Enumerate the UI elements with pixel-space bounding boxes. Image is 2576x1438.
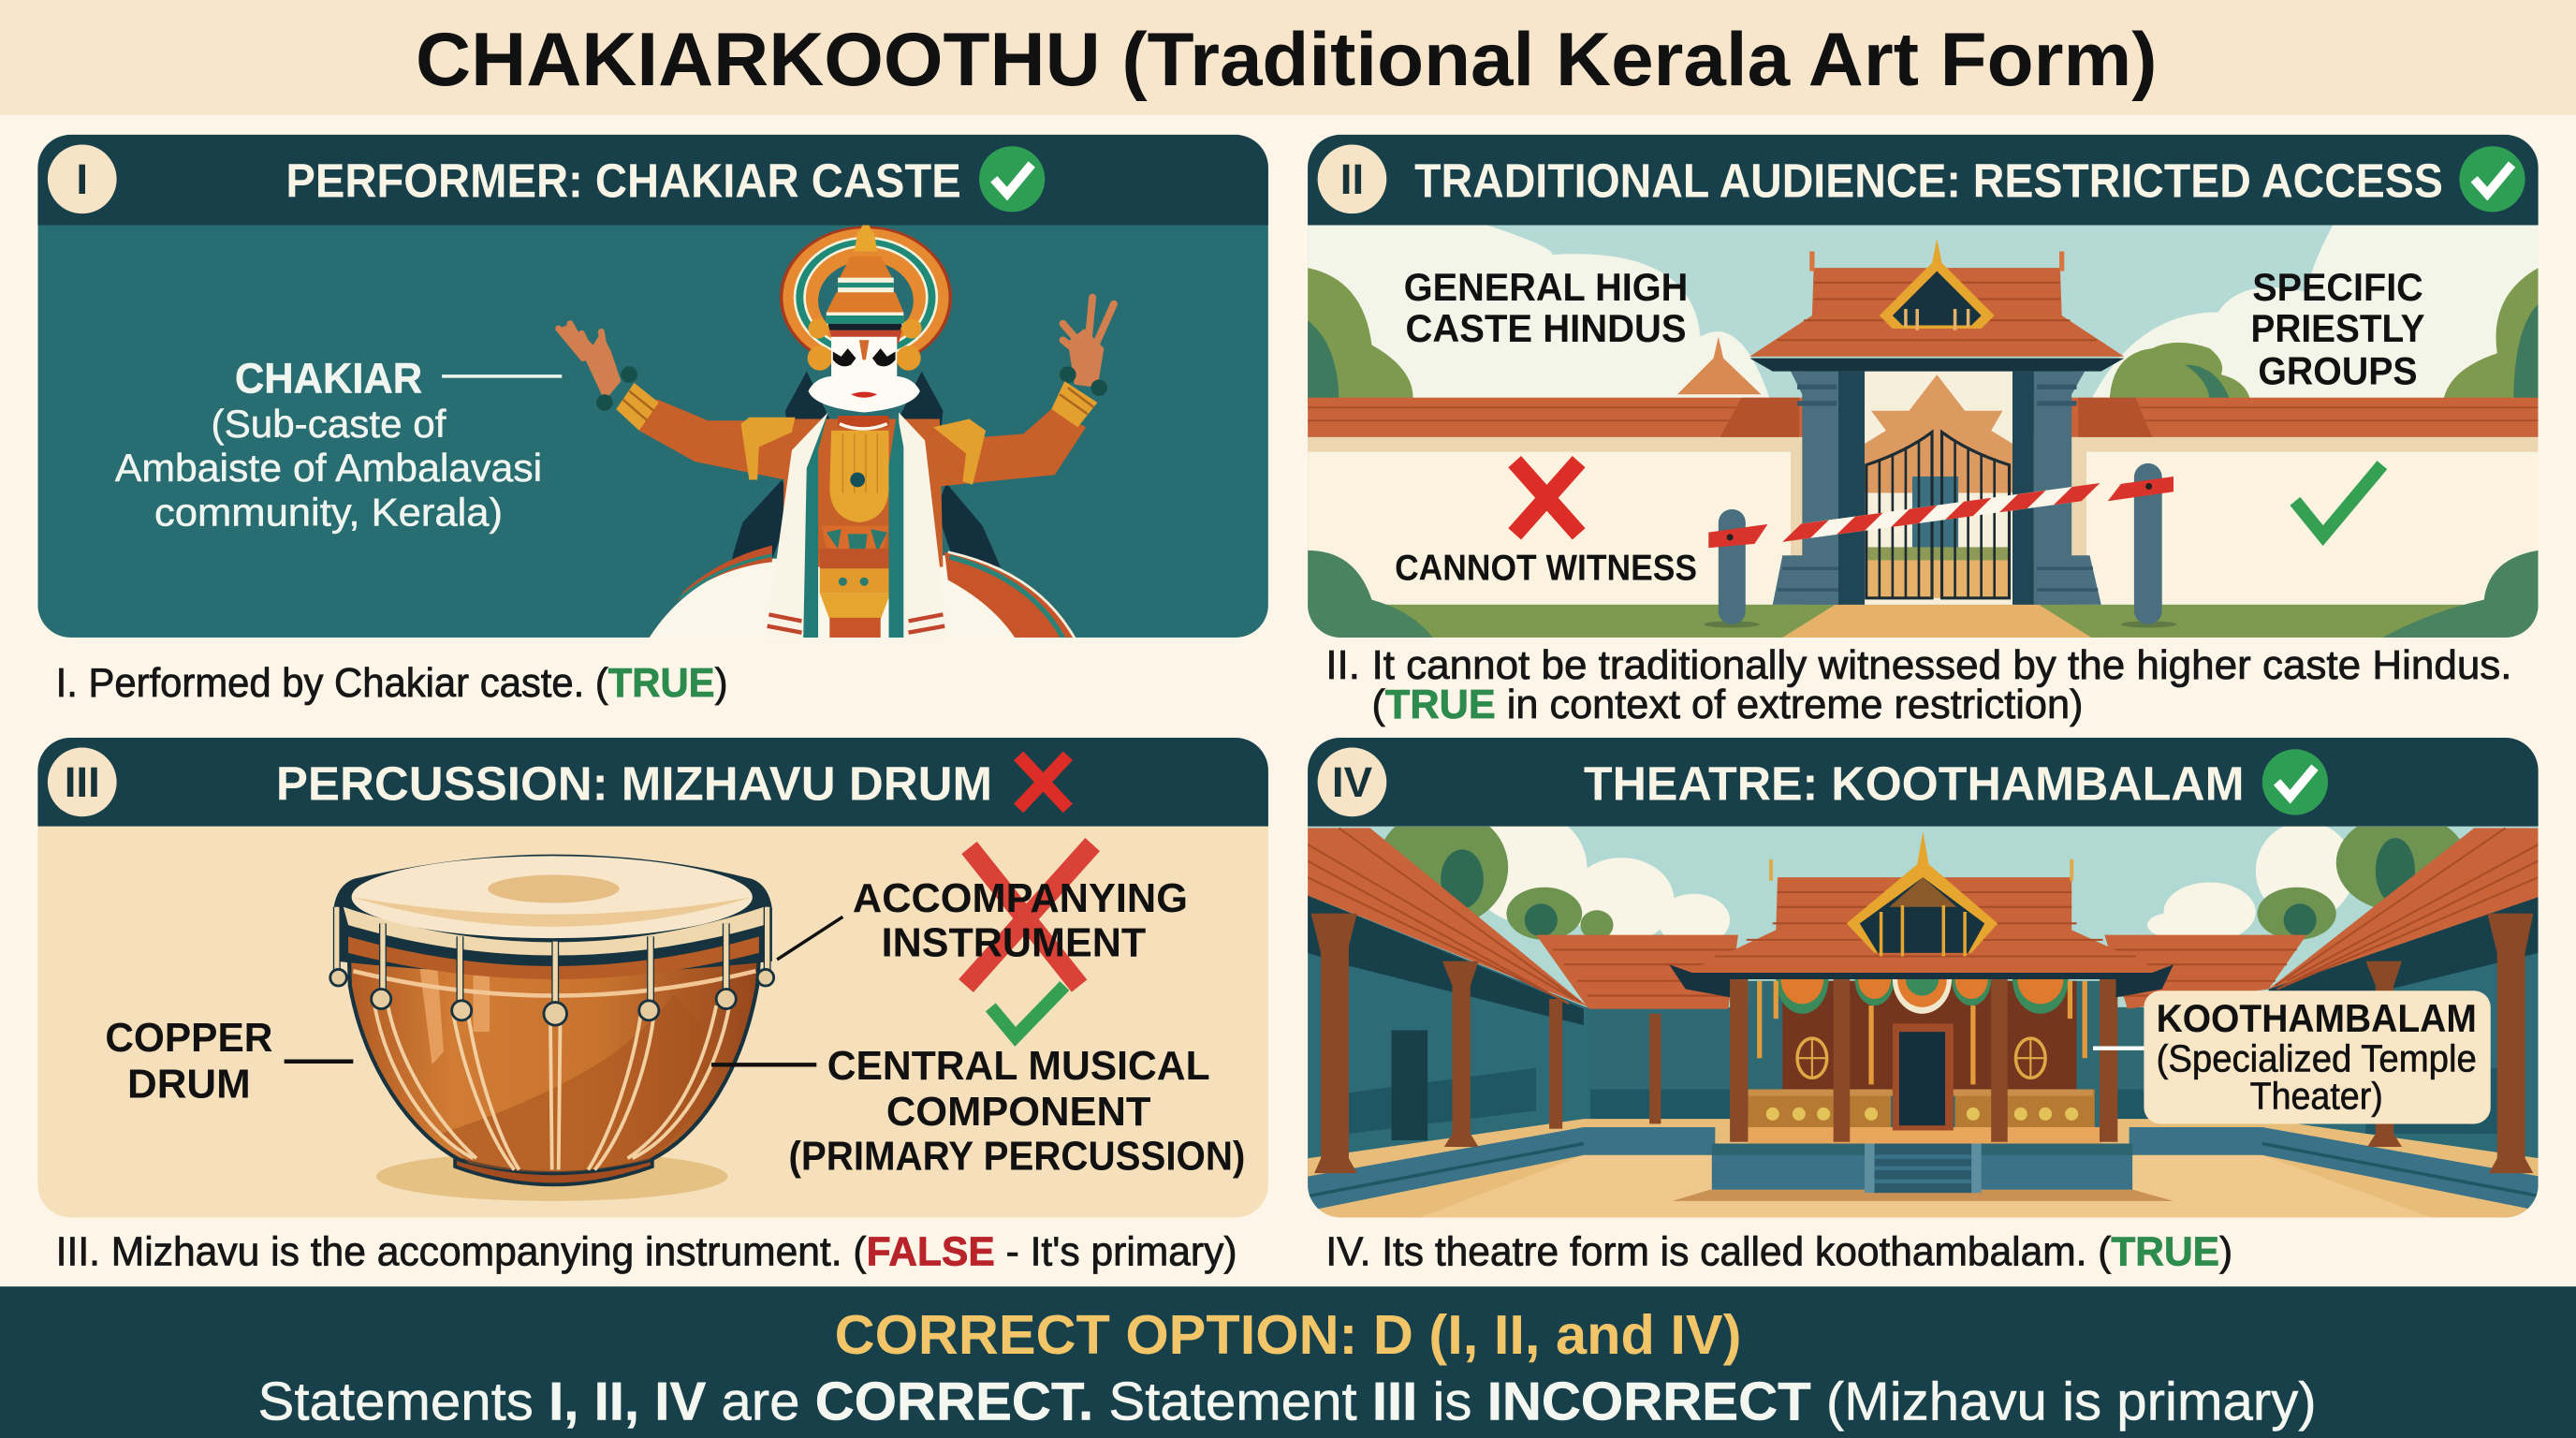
panel: I performer — [37, 135, 1268, 640]
panel I header: PERFORMER: CHAKIAR CASTE — [285, 154, 961, 208]
back wall — [1586, 1007, 2144, 1090]
side roofs — [1308, 829, 1588, 1007]
panel I body and dancer illustration — [37, 218, 1268, 640]
panel II header: TRADITIONAL AUDIENCE: RESTRICTED ACCESS — [1414, 154, 2443, 208]
ground — [1308, 605, 2539, 638]
medallions — [1797, 1038, 1827, 1078]
gable — [1847, 831, 1998, 953]
caption II: II. — [1325, 642, 1360, 688]
shoulder pads — [741, 418, 795, 479]
panel IV temple illustration — [1308, 808, 2539, 1217]
panel III labels and leaders: (PRIMARY PERCUSSION) — [788, 1134, 1245, 1180]
red x over accompanying label — [966, 844, 1092, 986]
title — [0, 0, 2576, 115]
panel I header — [37, 135, 1268, 225]
panel II labels — [1395, 265, 2425, 589]
right hand — [1068, 329, 1104, 388]
panel II labels: GENERAL HIGH — [1404, 265, 1688, 309]
sleeves — [639, 399, 788, 479]
clouds — [1308, 225, 2539, 403]
scarves — [777, 412, 827, 567]
gate opening — [1863, 372, 2014, 605]
caption I: I. Performed by Chakiar caste. (TRUE) — [56, 660, 728, 706]
clouds — [1488, 826, 2349, 935]
red x — [1515, 462, 1579, 534]
callout: Theater) — [2250, 1075, 2383, 1118]
panel III labels and leaders: CENTRAL MUSICAL — [827, 1043, 1210, 1089]
panel II labels: SPECIFIC — [2252, 265, 2423, 309]
callout: KOOTHAMBALAM — [2157, 996, 2477, 1040]
side pillars — [1311, 914, 2533, 1173]
barrier — [1704, 621, 1760, 627]
left wing wall — [1308, 895, 1590, 1183]
drum illustration — [330, 855, 774, 1201]
green check — [990, 986, 1064, 1036]
shrubs — [1308, 550, 1432, 638]
callout — [2093, 990, 2491, 1123]
panel II labels: CANNOT WITNESS — [1395, 549, 1697, 589]
floor and ledges — [1308, 1119, 2539, 1217]
callout: (Specialized Temple — [2157, 1036, 2477, 1079]
pillars — [1773, 372, 2101, 605]
bracelets — [616, 383, 659, 431]
footer: Statements I, II, IV are CORRECT. Statement III is INCORRECT (Mizhavu is primary) — [258, 1372, 2317, 1431]
panel I labels: Ambaiste of Ambalavasi — [115, 446, 542, 490]
panel IV header: THEATRE: KOOTHAMBALAM — [1584, 757, 2244, 811]
door — [1893, 1023, 1954, 1130]
gate roof — [1749, 268, 2124, 357]
iron gate — [1866, 433, 2009, 598]
panel III labels and leaders: INSTRUMENT — [882, 919, 1146, 965]
garlands — [1760, 979, 2085, 1084]
panel I header: I — [76, 155, 88, 203]
footer: CORRECT OPTION: D (I, II, and IV) — [835, 1303, 1741, 1366]
wrist balls — [621, 366, 637, 383]
back roofs — [1536, 935, 2306, 1009]
necklace bib — [838, 416, 889, 427]
torso — [782, 419, 943, 566]
left hand — [562, 325, 622, 395]
panel III header — [37, 738, 1268, 827]
main roof — [1686, 877, 2165, 973]
right wing wall — [2269, 895, 2539, 1183]
panel I labels: (Sub-caste of — [212, 402, 446, 446]
stage — [1748, 981, 2100, 1132]
caption II: (TRUE in context of extreme restriction) — [1372, 682, 2083, 727]
panel I labels: community, Kerala) — [154, 491, 503, 535]
panel III body — [37, 827, 1268, 1217]
caption II: It cannot be traditionally witnessed by the higher caste Hindus. — [1372, 642, 2512, 688]
panel III header: III — [65, 758, 100, 806]
halo — [780, 226, 952, 369]
panel III labels and leaders: COPPER — [105, 1015, 272, 1061]
panel II gate illustration — [1308, 225, 2539, 638]
wall — [1308, 437, 2539, 556]
panel III labels and leaders: DRUM — [127, 1061, 251, 1107]
caption II — [1325, 642, 2512, 727]
panel: IV theatre — [1308, 738, 2539, 1217]
stage pillars — [1730, 979, 2117, 1142]
panel: III percussion — [37, 738, 1268, 1217]
plinth — [1712, 1143, 2132, 1193]
caption III: III. Mizhavu is the accompanying instrument. (FALSE - It's primary) — [56, 1228, 1237, 1274]
panel I labels: CHAKIAR — [235, 354, 422, 402]
panel IV header: IV — [1332, 758, 1373, 806]
panel II header: II — [1340, 155, 1364, 203]
green check — [2295, 465, 2382, 536]
waist and belt — [820, 549, 890, 570]
trees — [1308, 268, 2539, 403]
hair — [729, 372, 1001, 566]
footer — [0, 1286, 2576, 1438]
panel III labels and leaders: ACCOMPANYING — [853, 875, 1188, 921]
panel I labels — [115, 354, 562, 535]
crown — [859, 225, 872, 232]
panel IV header — [1308, 738, 2539, 827]
panel III header: PERCUSSION: MIZHAVU DRUM — [276, 757, 992, 811]
caption IV: IV. Its theatre form is called koothambalam. (TRUE) — [1325, 1228, 2232, 1274]
pendants — [822, 526, 889, 549]
panel: II audience — [1308, 135, 2539, 638]
title: CHAKIARKOOTHU (Traditional Kerala Art Form) — [416, 18, 2157, 102]
face — [808, 345, 832, 371]
back spire — [1677, 337, 1761, 394]
panel III labels and leaders: COMPONENT — [886, 1089, 1151, 1135]
flower panels — [1766, 1108, 2078, 1121]
panel II labels: GROUPS — [2258, 349, 2418, 393]
panel III labels and leaders — [105, 875, 1245, 1180]
panel II labels: PRIESTLY — [2250, 306, 2425, 350]
panel II header — [1308, 135, 2539, 225]
skirt — [650, 555, 1015, 638]
trees — [1384, 826, 2460, 940]
panel II labels: CASTE HINDUS — [1405, 306, 1687, 350]
